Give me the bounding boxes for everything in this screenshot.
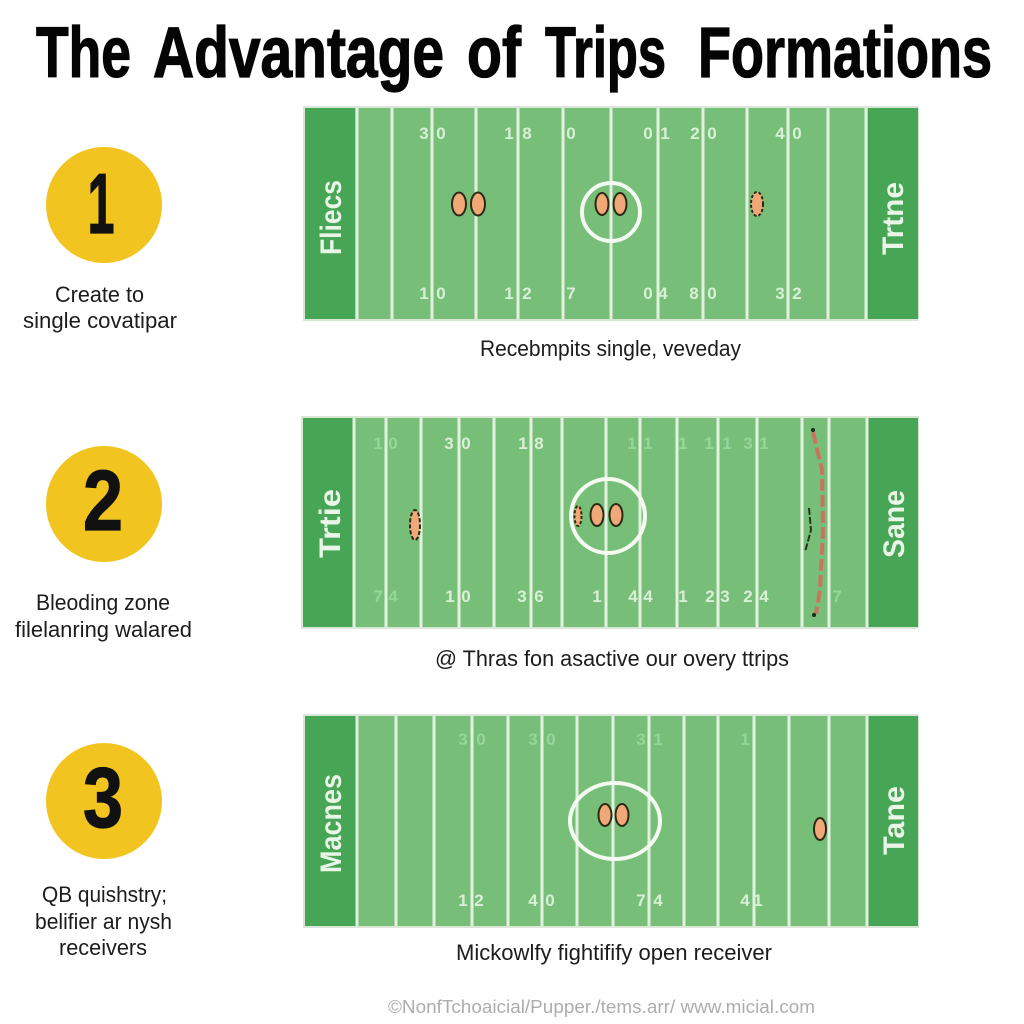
- end zone label right: Tane: [878, 786, 911, 855]
- step 3 panel: [35, 715, 918, 965]
- red streak: [805, 428, 823, 617]
- players: [452, 192, 763, 216]
- number badge 1: 1: [88, 157, 114, 252]
- field diagram 1: [304, 107, 918, 320]
- end zone label right: Trtne: [877, 182, 910, 255]
- center circle: [570, 783, 660, 859]
- step 1 description: Create to: [55, 282, 144, 307]
- end zone label left: Trtie: [314, 489, 347, 558]
- center circle: [571, 479, 645, 553]
- step 1 description: [23, 282, 177, 333]
- field diagram 3: 3030311: [458, 730, 750, 749]
- number badge 2: [46, 446, 162, 562]
- players: [410, 504, 622, 540]
- number badge 1: [46, 147, 162, 263]
- field diagram 2: 3018: [444, 434, 544, 453]
- title: [36, 14, 992, 93]
- field diagram 1: 30180012040: [419, 124, 802, 143]
- field diagram 2: 7: [832, 587, 842, 606]
- field 1 caption: Recebmpits single, veveday: [480, 336, 742, 361]
- end zone label left: Macnes: [315, 774, 348, 873]
- players: [598, 804, 826, 840]
- step 1 panel: [23, 107, 918, 361]
- step 2 description: filelanring walared: [15, 617, 192, 642]
- field diagram 3: 12407441: [458, 891, 763, 910]
- number badge 3: 3: [83, 751, 123, 846]
- field diagram 2: 74: [373, 587, 398, 606]
- step 2 description: [15, 590, 192, 642]
- field diagram 1: 10127048032: [419, 284, 802, 303]
- step 3 description: QB quishstry;: [42, 882, 167, 907]
- field diagram 2: 10: [373, 434, 398, 453]
- field 2 caption: @ Thras fon asactive our overy ttrips: [435, 646, 789, 671]
- field diagram 2: [302, 417, 918, 628]
- step 1 description: single covatipar: [23, 308, 177, 333]
- center circle: [582, 183, 640, 241]
- end zone label left: Fliecs: [315, 180, 348, 255]
- step 2 description: Bleoding zone: [36, 590, 170, 615]
- field diagram 3: [304, 715, 918, 927]
- field diagram 2: 103614412324: [445, 587, 769, 606]
- step 3 description: receivers: [59, 935, 147, 960]
- end zone label right: Sane: [878, 490, 911, 558]
- field diagram 2: 1111131: [627, 434, 769, 453]
- title: Trips: [545, 14, 666, 93]
- number badge 2: 2: [83, 454, 123, 549]
- field 3 caption: Mickowlfy fightifify open receiver: [456, 940, 772, 965]
- step 3 description: belifier ar nysh: [35, 909, 172, 934]
- title: Advantage: [153, 14, 444, 93]
- title: The: [36, 14, 131, 93]
- number badge 3: [46, 743, 162, 859]
- step 2 panel: [15, 417, 918, 671]
- footer credit: ©NonfTchoaicial/Pupper./tems.arr/ www.micial.com: [388, 997, 815, 1017]
- title: of: [467, 14, 521, 93]
- step 3 description: [35, 882, 172, 960]
